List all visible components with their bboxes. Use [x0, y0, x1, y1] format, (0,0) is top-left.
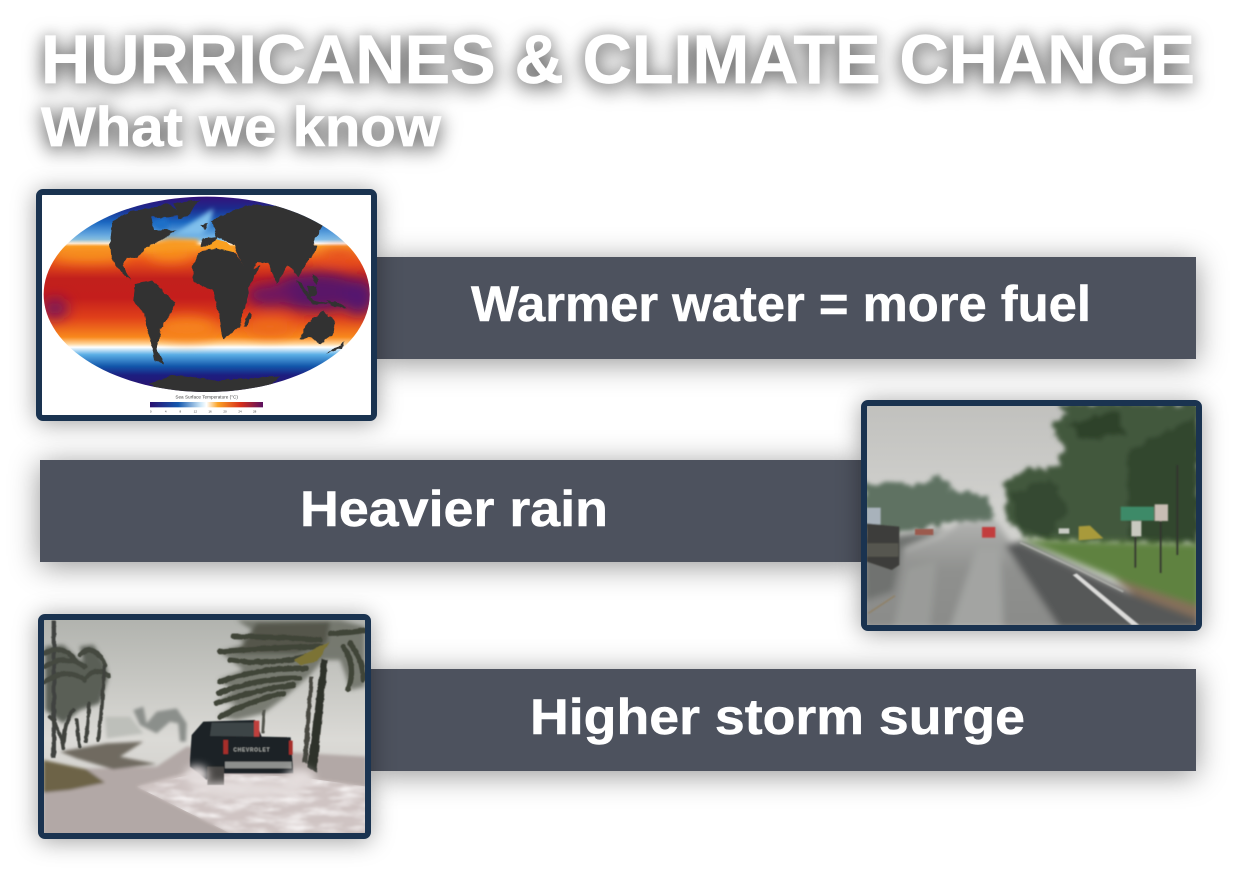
Greenland — [173, 200, 200, 219]
north cold water — [173, 208, 213, 235]
Borneo and Philippines — [307, 286, 317, 297]
Eurasia — [201, 205, 323, 284]
South America — [133, 280, 175, 364]
Japan — [309, 246, 318, 258]
banner: warmer water: Warmer water = more fuel — [471, 276, 1091, 332]
green road sign — [1121, 507, 1154, 521]
Antarctica — [150, 375, 280, 393]
title block — [28, 21, 1204, 165]
truck on left — [867, 508, 881, 524]
Madagascar — [243, 313, 251, 327]
Iceland and UK — [200, 223, 207, 230]
New Guinea — [325, 301, 347, 308]
palm crown masses — [45, 620, 365, 723]
distant palms — [133, 707, 187, 742]
distant trees — [863, 477, 993, 532]
yellow sign shape — [1079, 526, 1103, 540]
New Zealand — [327, 342, 345, 353]
left palms — [45, 650, 108, 682]
curb — [1020, 542, 1123, 592]
North America — [110, 203, 182, 280]
colour scale: 0 — [150, 409, 152, 413]
banner: heavier rain: Heavier rain — [300, 481, 608, 537]
Australia — [300, 311, 336, 344]
red vehicle — [982, 527, 995, 538]
palm trunks — [307, 658, 328, 773]
colour scale: 4 — [165, 409, 167, 413]
photo: sea surface temperature map — [36, 189, 377, 421]
colour scale: Sea Surface Temperature (°C) — [175, 395, 238, 400]
subheading: What we know — [41, 95, 441, 158]
warm Atlantic tongue and Mediterranean — [143, 239, 198, 252]
spray — [185, 766, 315, 797]
left verge — [863, 528, 950, 602]
banner: higher storm surge — [371, 669, 1196, 771]
Sumatra and Java — [296, 281, 330, 304]
misty trees in background — [105, 717, 143, 738]
photo: rainy road — [861, 400, 1202, 631]
colour scale: 12 — [194, 409, 197, 413]
banner: heavier rain — [40, 460, 862, 562]
photo: truck in storm surge — [38, 614, 371, 839]
colour scale: 8 — [179, 409, 181, 413]
colour scale: 16 — [208, 409, 212, 413]
pole — [52, 620, 56, 758]
banner: higher storm surge: Higher storm surge — [530, 689, 1025, 745]
road surface — [863, 522, 1143, 628]
sign posts — [1135, 465, 1177, 573]
Africa — [192, 248, 260, 340]
pickup truck — [190, 720, 293, 780]
sandy mounds — [43, 760, 105, 793]
water surface — [43, 747, 367, 837]
main heading: HURRICANES & CLIMATE CHANGE — [41, 21, 1195, 98]
colour scale — [150, 395, 263, 413]
right palm fronds — [216, 630, 365, 717]
near trees — [1005, 403, 1200, 545]
white road line — [1073, 573, 1139, 625]
banner: warmer water — [377, 257, 1196, 359]
grass verge — [1020, 539, 1200, 608]
colour scale: 24 — [238, 409, 242, 413]
dirt edge — [1113, 578, 1200, 628]
wet shoulder — [1005, 542, 1197, 628]
tailgate lettering: CHEVROLET — [233, 747, 270, 753]
colour scale: 28 — [253, 409, 257, 413]
foam texture — [137, 773, 367, 833]
colour scale: 20 — [223, 409, 227, 413]
